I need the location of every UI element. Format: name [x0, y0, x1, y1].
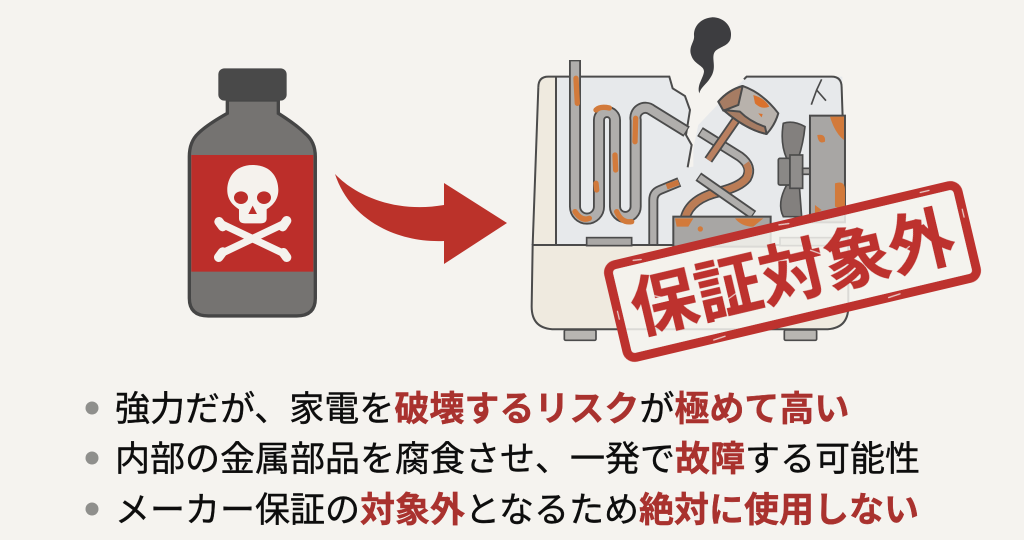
stamp distress marks: [607, 183, 978, 360]
appliance window: [555, 77, 842, 247]
bullet 1: 強力だが、家電を破壊するリスクが極めて高い: [115, 390, 849, 429]
icon: poison bottle: [189, 68, 315, 316]
appliance feet: [564, 330, 817, 340]
lower housing: [532, 245, 848, 329]
stamp: warranty void: [607, 183, 978, 360]
motor rod: [708, 117, 738, 160]
appliance left side: [533, 77, 556, 245]
small vent: [587, 238, 632, 246]
rusty side panel: [810, 116, 845, 222]
rusty base block: [673, 217, 771, 247]
motor head: [718, 86, 778, 134]
bullet 3: メーカー保証の対象外となるため絶対に使用しない: [115, 491, 919, 530]
icon: broken appliance: [532, 17, 848, 340]
serpentine heating pipe: [575, 60, 753, 245]
icon: crossbones: [219, 221, 287, 257]
crack gap: [669, 73, 744, 167]
arrow: [335, 174, 507, 264]
S pipe: [685, 132, 749, 218]
stamp text: 保証対象外: [624, 199, 962, 347]
bullet 2: 内部の金属部品を腐食させ、一発で故障する可能性: [115, 440, 920, 479]
icon: smoke: [690, 17, 731, 93]
fan: [778, 122, 811, 217]
icon: skull: [227, 165, 278, 223]
short broken pipe: [653, 182, 679, 245]
